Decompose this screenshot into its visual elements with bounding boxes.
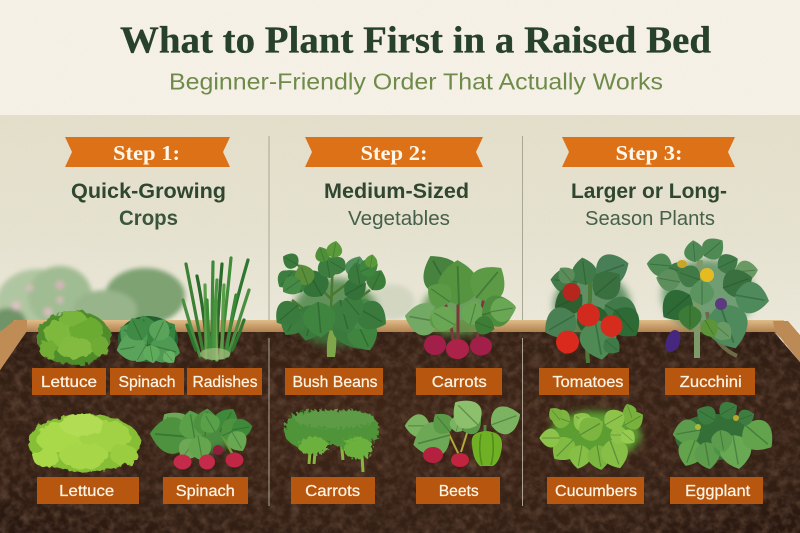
plant: carrots bottom (284, 410, 379, 472)
heading: larger or long-season plants: Season Plants (585, 208, 715, 230)
label: lettuce: Lettuce (41, 374, 97, 391)
label: bush beans (285, 368, 383, 395)
back rim (14, 320, 784, 333)
plant: radishes bottom (148, 403, 254, 470)
step 2 ribbon: Step 2: (360, 141, 428, 165)
label: carrots (416, 368, 502, 395)
label: spinach (110, 368, 184, 395)
raised bed (0, 320, 800, 533)
label: beets (416, 477, 500, 504)
left wood side (0, 320, 27, 370)
plant: eggplant (671, 397, 782, 472)
heading: quick-growing crops: Crops (119, 207, 178, 230)
lower panel background (0, 115, 800, 330)
label: tomatoes: Tomatoes (552, 374, 624, 391)
plant: cucumbers (539, 402, 648, 473)
label: eggplant (670, 477, 763, 504)
label: bush beans: Bush Beans (292, 374, 378, 391)
step 1 ribbon (65, 137, 230, 167)
dividers (269, 136, 522, 320)
step 1 ribbon: Step 1: (113, 141, 180, 165)
label: spinach 2 (163, 477, 248, 504)
heading: medium-sized vegetables: Vegetables (348, 208, 450, 230)
label: lettuce 2: Lettuce (59, 483, 114, 500)
heading: larger or long-season plants (571, 180, 727, 230)
heading: quick-growing crops (71, 180, 226, 230)
heading: medium-sized vegetables (324, 180, 469, 230)
label: lettuce (32, 368, 106, 395)
plant: beets top (402, 247, 519, 359)
plant: zucchini (646, 232, 772, 358)
plant: lettuce top (37, 311, 111, 365)
blurred background shrubs (0, 266, 415, 337)
lower dividers (269, 338, 522, 506)
title: What to Plant First in a Raised Bed (120, 20, 711, 62)
header background (0, 0, 800, 115)
plant: tomatoes (537, 248, 648, 363)
label: carrots 2 (291, 477, 375, 504)
step 3 ribbon (562, 137, 735, 167)
heading: larger or long-season plants: Larger or Long- (571, 180, 727, 203)
label: radishes (187, 368, 262, 395)
label: zucchini (665, 368, 755, 395)
heading: medium-sized vegetables: Medium-Sized (324, 180, 469, 203)
heading: quick-growing crops: Quick-Growing (71, 180, 226, 203)
plant: bush beans (269, 240, 393, 357)
label: eggplant: Eggplant (685, 483, 751, 500)
label: carrots: Carrots (432, 374, 487, 391)
plant: chives (183, 258, 249, 360)
column 3 (537, 137, 782, 504)
label: cucumbers (547, 477, 644, 504)
label: tomatoes (539, 368, 629, 395)
plant: spinach top (112, 313, 184, 367)
label: beets: Beets (439, 483, 479, 500)
label: radishes: Radishes (192, 374, 258, 391)
subtitle: Beginner-Friendly Order That Actually Works (169, 68, 663, 94)
right wood side (773, 321, 800, 362)
step 3 ribbon: Step 3: (616, 141, 682, 165)
label: carrots 2: Carrots (305, 483, 360, 500)
plant: lettuce bottom (29, 414, 141, 472)
plant: beets bottom (405, 392, 525, 467)
label: lettuce 2 (37, 477, 139, 504)
label: spinach 2: Spinach (176, 483, 235, 500)
column 1 (29, 137, 262, 504)
step 2 ribbon (305, 137, 483, 167)
column 2 (269, 137, 525, 504)
label: spinach: Spinach (118, 374, 176, 391)
soil (0, 332, 800, 533)
label: zucchini: Zucchini (680, 374, 742, 391)
label: cucumbers: Cucumbers (555, 483, 637, 500)
